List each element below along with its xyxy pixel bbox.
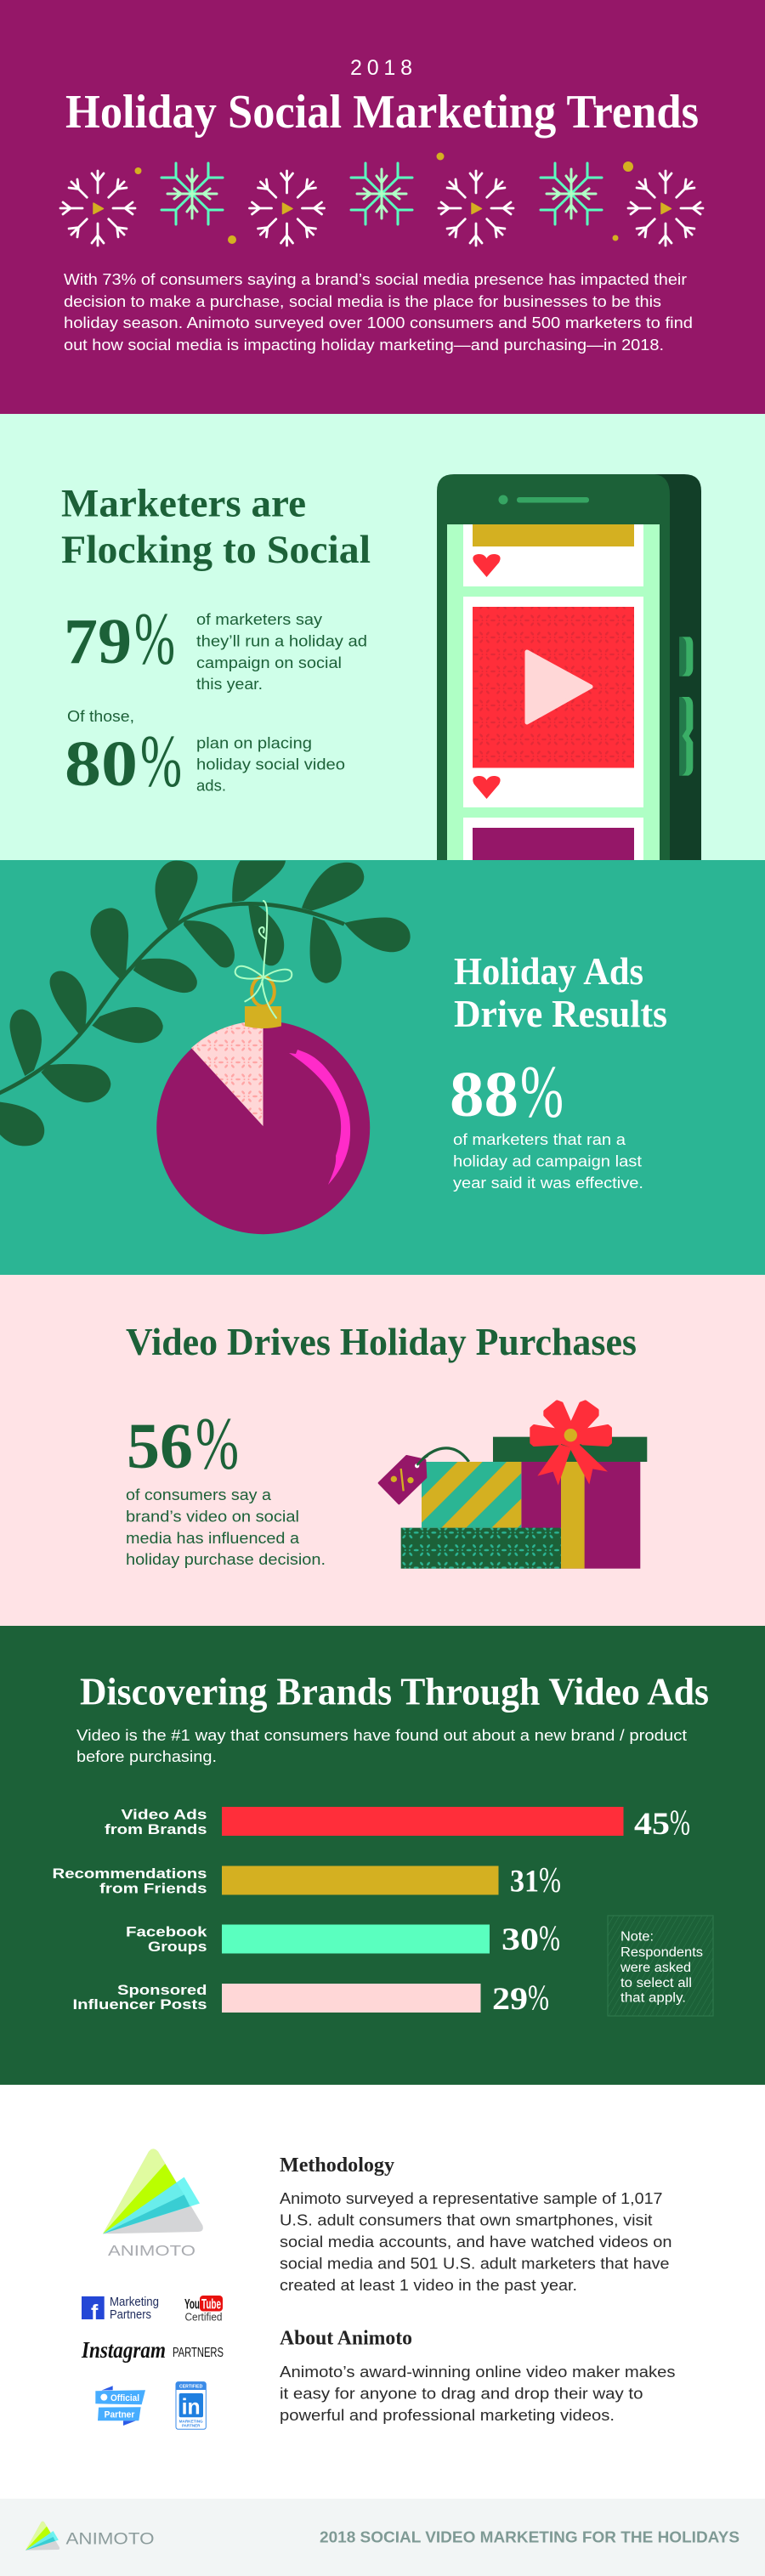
stat: 79%: of marketers say bbox=[196, 611, 322, 628]
bar: video ads: Video Ads bbox=[121, 1807, 207, 1822]
heading: Drive Results bbox=[454, 992, 667, 1035]
stat: 79%: they’ll run a holiday ad bbox=[196, 632, 367, 649]
stat description: holiday purchase decision. bbox=[126, 1551, 326, 1568]
panel: methodology and about bbox=[0, 2085, 765, 2499]
panel: discovering brands bbox=[0, 1626, 765, 2085]
bar: recommendations: from Friends bbox=[99, 1880, 207, 1897]
bar: recommendations: 31 bbox=[510, 1865, 539, 1899]
about body: powerful and professional marketing videos. bbox=[280, 2407, 615, 2424]
bar: facebook groups: Facebook bbox=[126, 1924, 207, 1939]
methodology body: social media accounts, and have watched videos on bbox=[280, 2233, 672, 2250]
intro text bbox=[76, 1727, 687, 1765]
stat description bbox=[126, 1486, 326, 1568]
intro text: out how social media is impacting holiday marketing—and purchasing—in 2018. bbox=[64, 336, 664, 354]
stat description: of marketers that ran a bbox=[453, 1131, 626, 1148]
title: Holiday Social Marketing Trends bbox=[65, 86, 699, 139]
stat description: of consumers say a bbox=[126, 1486, 272, 1503]
bar: recommendations: % bbox=[539, 1861, 561, 1900]
badge: facebook marketing partners bbox=[82, 2296, 159, 2324]
note box: were asked bbox=[620, 1961, 691, 1975]
stat: 88% bbox=[450, 1051, 564, 1134]
stat: 56% bbox=[127, 1403, 239, 1486]
of those label: Of those, bbox=[67, 708, 134, 725]
methodology body: created at least 1 video in the past year. bbox=[280, 2277, 577, 2294]
about body bbox=[280, 2364, 675, 2424]
badge: twitter official partner: Partner bbox=[105, 2409, 135, 2420]
panel: marketers flocking to social bbox=[0, 414, 765, 860]
bar: facebook groups bbox=[126, 1919, 560, 1958]
stat: 79%: % bbox=[134, 598, 175, 681]
intro text: decision to make a purchase, social media is the place for businesses to be this bbox=[64, 292, 661, 310]
branch with leaves bbox=[0, 861, 411, 1146]
badge: youtube certified: Tube bbox=[201, 2296, 221, 2312]
stat: 80%: plan on placing bbox=[196, 734, 312, 751]
bar: facebook groups: 30 bbox=[502, 1922, 539, 1957]
stat: 79% bbox=[64, 598, 367, 693]
note box bbox=[608, 1916, 713, 2016]
intro text: With 73% of consumers saying a brand’s social media presence has impacted their bbox=[64, 270, 687, 288]
badge: youtube certified: Certified bbox=[185, 2312, 223, 2324]
note box: Respondents bbox=[620, 1945, 703, 1960]
stat: 80%: holiday social video bbox=[196, 756, 345, 773]
heading: Marketers are bbox=[61, 481, 306, 525]
badge: facebook marketing partners: Partners bbox=[110, 2308, 151, 2322]
badge: instagram partners bbox=[81, 2337, 224, 2363]
intro text: holiday season. Animoto surveyed over 1000 consumers and 500 marketers to find bbox=[64, 314, 693, 331]
methodology body bbox=[280, 2190, 672, 2294]
footer logo: ANIMOTO bbox=[66, 2531, 155, 2548]
methodology heading: Methodology bbox=[280, 2154, 394, 2177]
note box: that apply. bbox=[620, 1990, 686, 2006]
bar: facebook groups: Groups bbox=[148, 1939, 207, 1955]
panel: video drives purchases bbox=[0, 1275, 765, 1626]
note box: Note: bbox=[620, 1929, 654, 1945]
bar: sponsored influencer posts: % bbox=[528, 1979, 549, 2018]
methodology body: social media and 501 U.S. adult marketers that have bbox=[280, 2256, 670, 2273]
bar: video ads: from Brands bbox=[105, 1821, 207, 1837]
stat description: media has influenced a bbox=[126, 1530, 300, 1547]
badge: youtube certified: You bbox=[184, 2296, 200, 2312]
stat: 80%: ads. bbox=[196, 777, 226, 794]
stat description: year said it was effective. bbox=[453, 1175, 643, 1192]
stat: 56%: % bbox=[196, 1403, 239, 1486]
heading bbox=[61, 481, 371, 572]
stat: 79%: this year. bbox=[196, 676, 263, 693]
stat: 79%: campaign on social bbox=[196, 654, 342, 671]
stat: 88%: 88 bbox=[450, 1059, 518, 1130]
year label: 2018 bbox=[350, 56, 412, 80]
animoto logo bbox=[103, 2149, 203, 2259]
stat: 80%: % bbox=[140, 721, 182, 803]
bar: recommendations bbox=[53, 1861, 561, 1900]
badge: instagram partners: Instagram bbox=[81, 2337, 166, 2363]
intro text bbox=[64, 270, 693, 354]
intro text: before purchasing. bbox=[76, 1748, 217, 1765]
heading: Holiday Ads bbox=[454, 949, 643, 993]
badge: twitter official partner: Official bbox=[110, 2393, 139, 2403]
stat: 80% bbox=[65, 721, 345, 803]
intro text: Video is the #1 way that consumers have found out about a new brand / product bbox=[76, 1727, 687, 1744]
bar: sponsored influencer posts bbox=[73, 1979, 549, 2018]
stat: 80%: 80 bbox=[65, 728, 138, 800]
stat: 88%: % bbox=[520, 1051, 564, 1134]
bar: video ads: % bbox=[670, 1803, 690, 1843]
stat description bbox=[453, 1131, 643, 1192]
heading: Video Drives Holiday Purchases bbox=[126, 1321, 637, 1363]
badge: linkedin certified: in bbox=[182, 2394, 201, 2420]
panel: header bbox=[0, 0, 765, 414]
stat description: holiday ad campaign last bbox=[453, 1152, 642, 1169]
about body: it easy for anyone to drag and drop their way to bbox=[280, 2385, 643, 2402]
snowflake row bbox=[60, 153, 703, 246]
badge: youtube certified bbox=[184, 2296, 223, 2324]
methodology body: U.S. adult consumers that own smartphones, visit bbox=[280, 2211, 653, 2228]
about heading: About Animoto bbox=[280, 2327, 412, 2349]
heading: Discovering Brands Through Video Ads bbox=[80, 1671, 709, 1713]
bar: facebook groups: % bbox=[539, 1919, 560, 1958]
badge: linkedin certified bbox=[176, 2382, 206, 2429]
bar chart bbox=[53, 1803, 690, 2018]
badge: linkedin certified: CERTIFIED bbox=[179, 2385, 202, 2390]
bar: recommendations: Recommendations bbox=[53, 1865, 207, 1882]
footer bbox=[0, 2499, 765, 2576]
ornament pie chart bbox=[156, 901, 370, 1234]
badge: facebook marketing partners: Marketing bbox=[110, 2296, 159, 2309]
footer title: 2018 SOCIAL VIDEO MARKETING FOR THE HOLIDAYS bbox=[320, 2528, 740, 2546]
stat description: brand’s video on social bbox=[126, 1508, 299, 1525]
footer logo bbox=[26, 2522, 155, 2551]
bar: sponsored influencer posts: Influencer Posts bbox=[73, 1996, 207, 2013]
heading: Flocking to Social bbox=[61, 528, 371, 572]
badge: linkedin certified: PARTNER bbox=[182, 2424, 201, 2428]
badge: linkedin certified: MARKETING bbox=[179, 2419, 203, 2423]
animoto logo: ANIMOTO bbox=[108, 2242, 196, 2259]
gift boxes illustration bbox=[379, 1401, 647, 1569]
panel: holiday ads drive results bbox=[0, 860, 765, 1275]
bar: video ads: 45 bbox=[634, 1807, 670, 1842]
badge: facebook marketing partners: f bbox=[91, 2301, 99, 2324]
badge: twitter official partner bbox=[95, 2386, 145, 2426]
about body: Animoto’s award-winning online video maker makes bbox=[280, 2364, 675, 2381]
note box: to select all bbox=[620, 1976, 692, 1990]
bar: sponsored influencer posts: 29 bbox=[492, 1982, 528, 2017]
phone illustration bbox=[437, 474, 701, 860]
methodology body: Animoto surveyed a representative sample of 1,017 bbox=[280, 2190, 663, 2207]
badge: instagram partners: PARTNERS bbox=[173, 2346, 224, 2360]
bar: video ads bbox=[105, 1803, 690, 1843]
stat: 79%: 79 bbox=[64, 606, 132, 677]
stat: 56%: 56 bbox=[127, 1411, 193, 1482]
heading bbox=[454, 949, 667, 1035]
bar: sponsored influencer posts: Sponsored bbox=[117, 1982, 207, 1998]
